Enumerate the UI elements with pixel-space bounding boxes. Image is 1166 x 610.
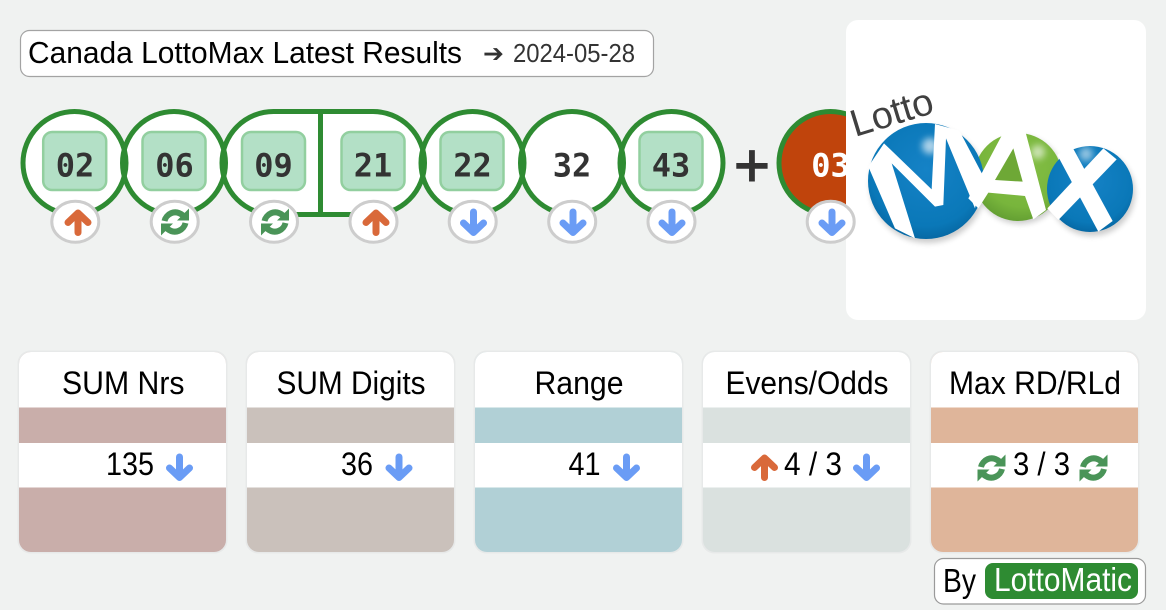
numbers: 43 xyxy=(652,146,690,184)
trend badges xyxy=(52,201,854,242)
badge: bonus down xyxy=(807,201,854,242)
badge: 22 down xyxy=(449,201,496,242)
badge: 43 down xyxy=(648,201,695,242)
panel: Max RD/RLd: Max RD/RLd xyxy=(949,365,1121,401)
numbers: 21 xyxy=(354,146,392,184)
badge: 32 down xyxy=(549,201,596,242)
numbers: 06 xyxy=(155,146,194,184)
panel: SUM Digits xyxy=(246,350,456,554)
number balls row xyxy=(23,111,723,215)
heading: Canada LottoMax Latest Results xyxy=(28,35,462,70)
panel: Range: Range xyxy=(534,365,624,401)
badge: 02 up xyxy=(52,201,99,242)
panel: Range: 41 xyxy=(568,446,600,482)
numbers: 09 xyxy=(254,146,293,184)
panel: SUM Nrs: 135 xyxy=(106,446,154,482)
credit badge: LottoMatic xyxy=(994,561,1132,598)
date: 2024-05-28 xyxy=(513,38,635,68)
ball discs xyxy=(23,112,723,214)
badge: 09 repeat xyxy=(250,201,298,242)
bonus ball xyxy=(779,112,882,214)
panel: Evens/Odds: 4 / 3 xyxy=(784,446,842,482)
panel: SUM Nrs: SUM Nrs xyxy=(62,365,184,401)
panel: SUM Digits: SUM Digits xyxy=(276,365,426,401)
logo: MAX spheres xyxy=(868,123,1135,243)
credit badge xyxy=(934,558,1146,604)
panel: Max RD/RLd: 3 / 3 xyxy=(1013,446,1070,482)
numbers: 22 xyxy=(453,146,492,184)
title bar xyxy=(20,30,654,76)
numbers xyxy=(56,146,690,184)
numbers: 32 xyxy=(553,146,591,184)
badge: 06 repeat xyxy=(151,201,198,242)
panel: Evens/Odds xyxy=(702,350,912,554)
ball outlines xyxy=(23,111,723,215)
bonus ball: 03 xyxy=(811,146,850,184)
credit badge: By xyxy=(943,562,976,599)
logo: Lotto wordmark: Lotto xyxy=(845,81,938,146)
panel: Max RD/RLd xyxy=(930,350,1140,554)
panel: Range xyxy=(474,350,684,554)
highlighted number squares xyxy=(43,132,702,190)
logo panel xyxy=(845,20,1146,320)
badge: 21 up xyxy=(350,201,397,242)
plus sign: + xyxy=(731,136,773,194)
panel: Evens/Odds: Evens/Odds xyxy=(726,365,888,401)
panel: SUM Nrs xyxy=(18,350,228,554)
numbers: 02 xyxy=(56,146,94,184)
date: ➔ xyxy=(483,39,504,68)
panel: SUM Digits: 36 xyxy=(341,446,373,482)
